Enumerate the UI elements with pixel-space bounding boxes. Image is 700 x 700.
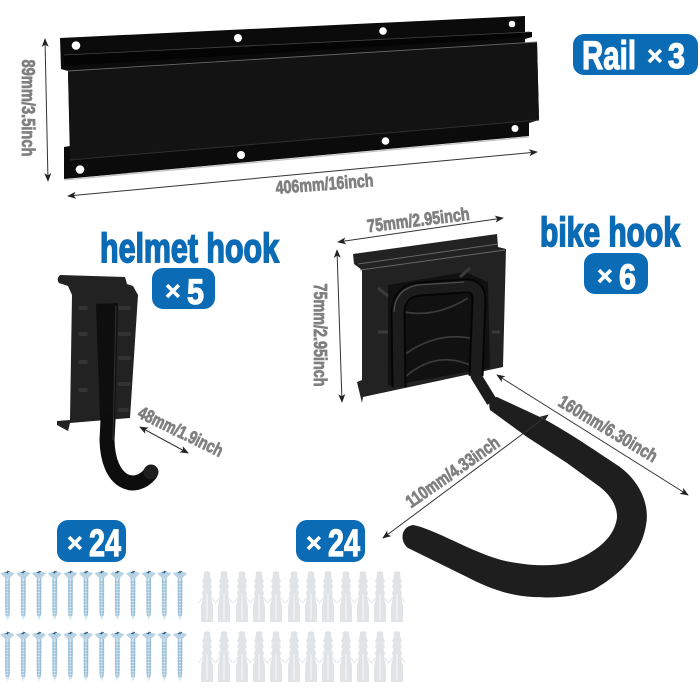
arrow: plate height xyxy=(337,250,342,402)
badge: helmet hook x5 xyxy=(152,268,215,312)
badge: anchors x24: 24 xyxy=(328,523,360,565)
label: hook length: 160mm/6.30inch xyxy=(555,391,661,466)
label: rail length: 406mm/16inch xyxy=(275,170,374,198)
badge: rail x3 xyxy=(573,34,698,78)
arrow: helmet hook depth xyxy=(140,427,188,453)
arrow: hook opening xyxy=(383,415,548,538)
panel: rail xyxy=(18,16,698,198)
badge: screws x24: 24 xyxy=(89,523,121,565)
arrow: hook length xyxy=(497,375,688,495)
badge: rail x3: × xyxy=(647,41,663,71)
badge: rail x3: Rail xyxy=(582,34,636,78)
panel: wall anchors xyxy=(198,520,406,682)
panel: bike hook xyxy=(310,204,688,597)
heading: helmet hook: helmet hook xyxy=(100,225,279,271)
badge: helmet hook x5: 5 xyxy=(187,273,204,312)
badge: rail x3: 3 xyxy=(668,37,685,76)
badge: bike hook x6 xyxy=(584,253,648,297)
screws: 24 pieces xyxy=(0,571,187,682)
badge: bike hook x6: 6 xyxy=(619,258,636,297)
rail product image xyxy=(60,16,539,180)
panel: helmet hook xyxy=(57,225,279,483)
badge: anchors x24: × xyxy=(306,528,322,558)
panel: screws xyxy=(0,520,187,682)
badge: anchors x24 xyxy=(296,520,365,565)
arrow: plate width xyxy=(338,218,503,242)
badge: helmet hook x5: × xyxy=(165,276,181,306)
badge: screws x24 xyxy=(57,520,126,565)
arrow: rail height xyxy=(45,39,48,181)
label: plate height: 75mm/2.95inch xyxy=(310,284,330,386)
wall anchors: 24 pieces xyxy=(198,571,406,682)
label: plate width: 75mm/2.95inch xyxy=(366,204,471,236)
label: hook opening: 110mm/4.33inch xyxy=(402,432,503,512)
label: rail height: 89mm/3.5inch xyxy=(18,60,38,156)
bike hook plate xyxy=(353,234,506,403)
helmet hook plate xyxy=(57,275,138,431)
label: helmet hook depth: 48mm/1.9inch xyxy=(135,402,226,461)
arrow: rail length xyxy=(68,152,537,196)
bike hook foam grip xyxy=(403,397,647,597)
badge: screws x24: × xyxy=(67,528,83,558)
bike hook wire xyxy=(394,282,492,402)
helmet hook rod xyxy=(96,303,158,483)
badge: bike hook x6: × xyxy=(597,261,613,291)
